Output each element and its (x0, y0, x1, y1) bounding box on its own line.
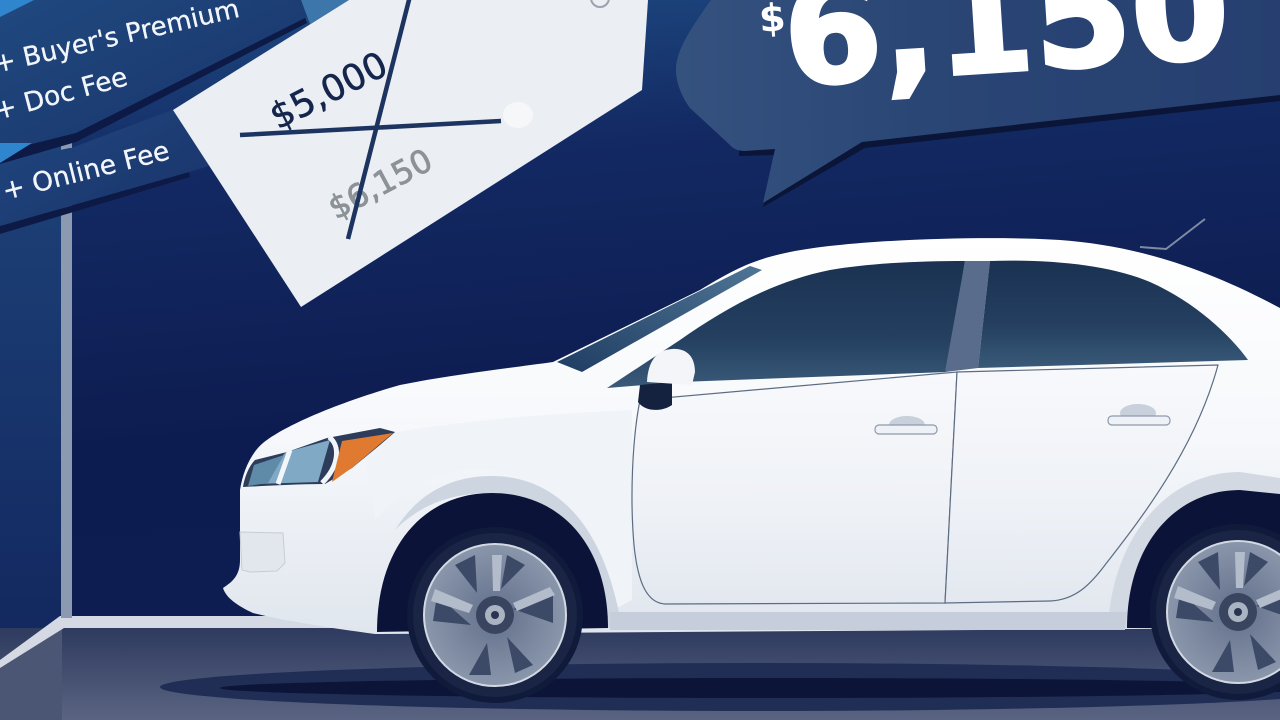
floor shadow (160, 663, 1280, 711)
floor shadow inner (220, 678, 1280, 698)
bumper vent (240, 532, 285, 572)
front fender lip (395, 476, 622, 628)
front window (607, 261, 965, 388)
hood shading (360, 410, 632, 612)
rear fender lip (1108, 472, 1280, 628)
speech bubble (676, 0, 1280, 207)
left wall panel (0, 140, 62, 660)
lighter wedge behind sign (301, 0, 349, 24)
front wheel (407, 527, 583, 703)
text: original price: $5,000 (263, 44, 394, 138)
rear wheel (1150, 524, 1280, 700)
text: crossed out price: $6,150 (322, 141, 439, 227)
front door (632, 372, 957, 604)
front wheel arch (377, 493, 608, 632)
text: online fee: + Online Fee (0, 135, 173, 207)
side skirt (610, 612, 1127, 630)
tag blob (503, 102, 533, 128)
mirror (638, 349, 695, 410)
cross line horizontal (240, 121, 501, 135)
post top piece (61, 130, 72, 148)
car body (223, 238, 1280, 634)
floor (0, 628, 1280, 720)
headlight (243, 428, 395, 487)
b pillar (945, 261, 990, 372)
cross line diagonal (348, 0, 410, 239)
rear door handle (1108, 404, 1170, 425)
panel: fee sign lower (0, 100, 209, 234)
front door handle (875, 416, 937, 434)
light blue corner middle (0, 143, 32, 163)
rear wheel arch (1127, 490, 1280, 628)
sign post (61, 130, 72, 618)
baseboard (0, 616, 400, 668)
car (223, 238, 1280, 703)
windshield (557, 266, 762, 372)
panel: fee sign upper (0, 0, 307, 164)
rear window (978, 261, 1248, 368)
light blue corner top (0, 0, 34, 17)
price tag (173, 0, 648, 307)
antenna (1140, 219, 1205, 249)
rear door (945, 365, 1218, 603)
tag hole (591, 0, 609, 7)
left floor wedge (0, 622, 62, 720)
